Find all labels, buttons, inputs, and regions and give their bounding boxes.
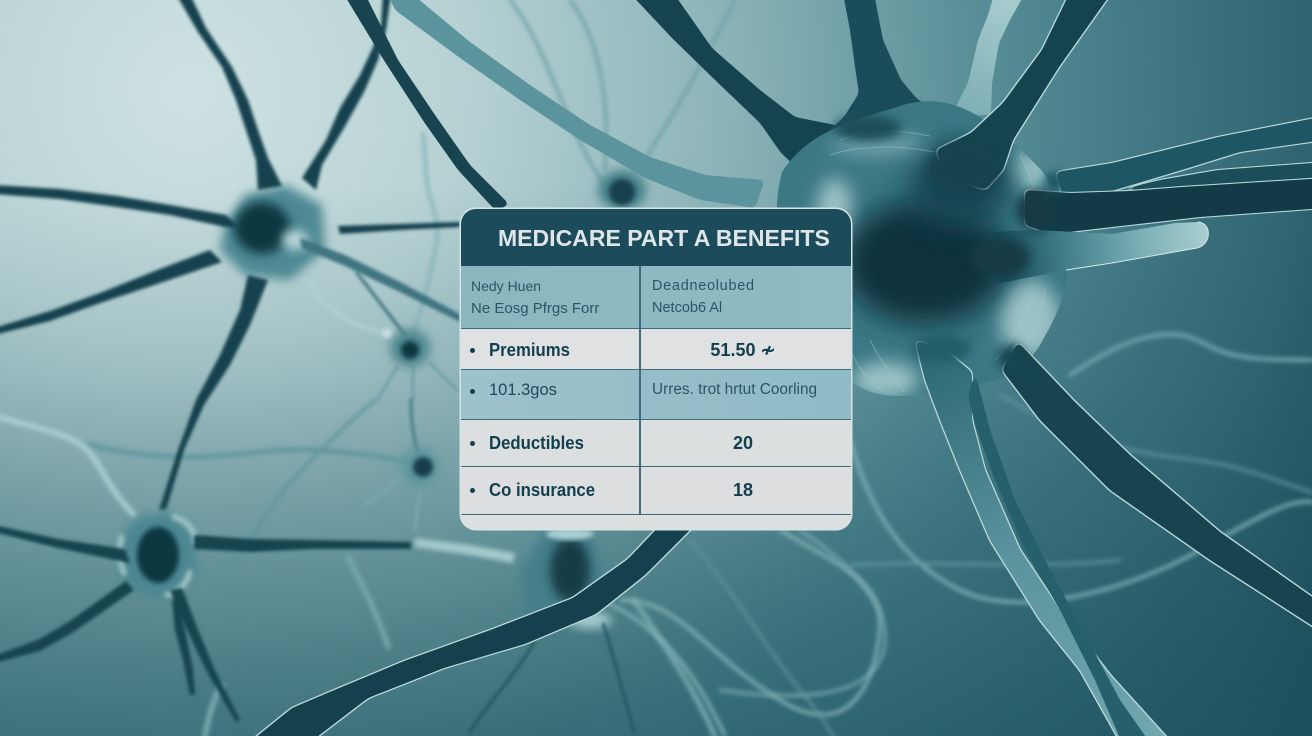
soma bbox=[776, 101, 1068, 396]
axon to the table bbox=[300, 238, 460, 322]
dendrite: pale top bbox=[950, 0, 1028, 115]
small neuron: lower left bbox=[0, 512, 515, 722]
row: deductibles: 20 bbox=[733, 433, 753, 453]
dendrite junction shadows bbox=[834, 115, 1067, 372]
soma pale patches bbox=[817, 135, 1060, 398]
row: column intro bbox=[461, 266, 851, 329]
title bar bbox=[461, 209, 851, 266]
small neuron: lower middle bbox=[469, 528, 880, 736]
small neuron: upper left bbox=[0, 0, 460, 510]
dendrites bbox=[0, 0, 460, 510]
row: co insurance: Co insurance bbox=[489, 480, 595, 500]
row: second blue row: 101.3gos bbox=[489, 381, 557, 399]
dendrite: top-left bbox=[625, 0, 845, 180]
small neurons: distant trio bbox=[357, 170, 646, 530]
faint background fibres bbox=[0, 0, 735, 736]
row: co insurance bbox=[461, 467, 851, 515]
finger rim light bbox=[1066, 222, 1208, 270]
row: premiums: 51.50 ≁ bbox=[710, 340, 776, 360]
row: deductibles: Deductibles bbox=[489, 433, 584, 453]
row: second blue row bbox=[461, 370, 851, 420]
dendrite: top bbox=[825, 0, 960, 145]
soma texture bbox=[830, 131, 1050, 392]
row: column intro: Nedy Huen bbox=[471, 278, 541, 294]
dendrite: right middle strand bbox=[1105, 162, 1312, 193]
dendrite: bottom pale tube bbox=[915, 340, 1178, 736]
row: second blue row: Urres. trot hrtut Coorling bbox=[652, 381, 817, 398]
table card: Medicare Part A benefits bbox=[461, 209, 851, 529]
dendrite: pale finger bbox=[990, 222, 1208, 285]
dendrite: bottom right dark bbox=[1002, 342, 1312, 634]
right-side wispy fibres bbox=[690, 334, 1312, 736]
row: column intro: Ne Eosg Pfrgs Forr bbox=[471, 300, 599, 317]
long dark axon top-left bbox=[340, 0, 510, 210]
row: deductibles bbox=[461, 420, 851, 467]
row: premiums: Premiums bbox=[489, 340, 570, 360]
row: column intro: Deadneolubed bbox=[652, 278, 755, 294]
dendrite: top-right bbox=[936, 0, 1115, 190]
long light axon from top bbox=[385, 0, 765, 208]
large neuron bbox=[625, 0, 1312, 736]
dark curved axon at bottom bbox=[240, 520, 700, 736]
soma dark core bbox=[843, 200, 1007, 324]
soma bbox=[220, 185, 325, 280]
dendrite: right large dark bbox=[1025, 178, 1312, 234]
title bar: MEDICARE PART A BENEFITS bbox=[498, 225, 830, 251]
row: co insurance: 18 bbox=[733, 480, 753, 500]
dendrite: bottom second strand bbox=[968, 372, 1155, 736]
row: column intro: Netcob6 Al bbox=[652, 300, 722, 316]
row: premiums bbox=[461, 329, 851, 370]
dendrite: right upper strand bbox=[1056, 116, 1312, 195]
